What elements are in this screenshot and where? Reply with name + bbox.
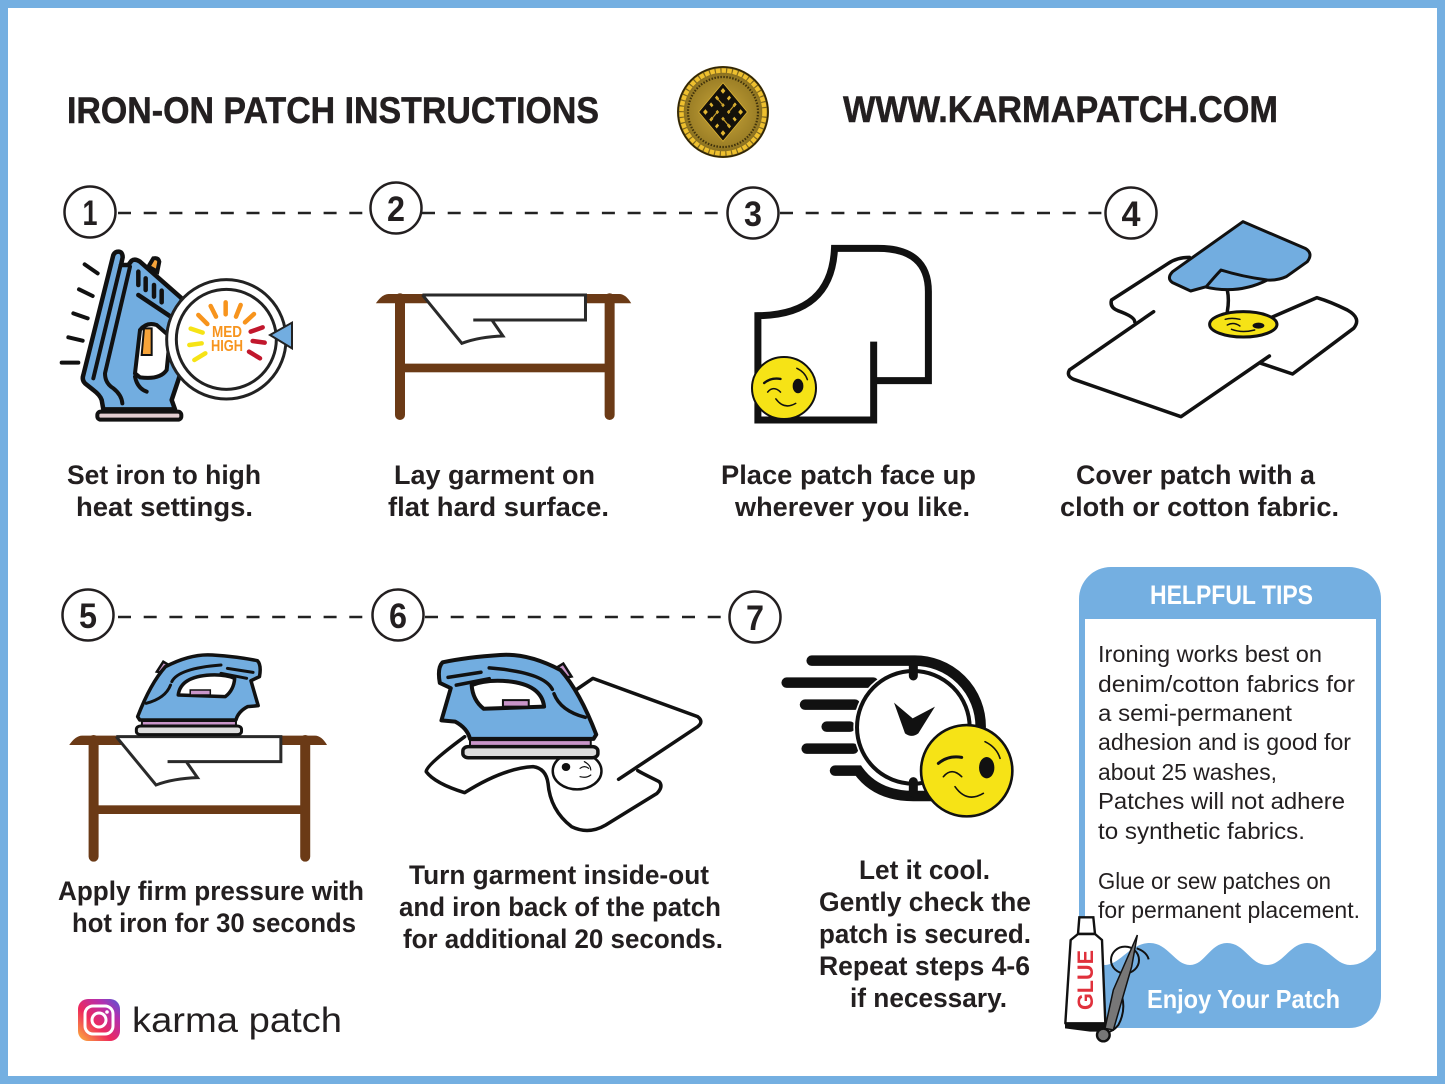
logo medallion xyxy=(677,66,769,158)
dial label xyxy=(211,324,243,355)
emoji patch on shirt xyxy=(752,357,816,419)
caption 5 xyxy=(58,876,364,938)
caption 6: Turn garment inside-out xyxy=(409,860,709,890)
caption 6 xyxy=(399,860,723,954)
step number 7: 7 xyxy=(746,599,764,638)
caption 6: and iron back of the patch xyxy=(399,892,721,922)
icon: glue tube and needle xyxy=(1065,917,1149,1041)
dial label: MED xyxy=(212,324,242,341)
step number 3: 3 xyxy=(744,195,762,234)
tips text: glue or sew: for permanent placement. xyxy=(1098,897,1360,923)
timeline row 1 xyxy=(64,182,1156,238)
icon: iron on table xyxy=(69,655,327,857)
instagram handle xyxy=(78,999,342,1041)
tips text: glue or sew: Glue or sew patches on xyxy=(1098,868,1331,894)
tips text: fabrics: a semi-permanent xyxy=(1098,700,1292,726)
step number 4 xyxy=(1106,188,1156,238)
step number 5: 5 xyxy=(79,597,97,636)
timeline row 2 xyxy=(62,590,780,642)
icon: shirt covered by cloth xyxy=(1068,222,1357,417)
caption 4: Cover patch with a xyxy=(1076,460,1316,490)
caption 3: Place patch face up xyxy=(721,460,976,490)
step number 7 xyxy=(730,592,780,642)
step number 1 xyxy=(64,186,116,238)
icon: instagram xyxy=(78,999,120,1041)
panel footer: Enjoy Your Patch xyxy=(1147,984,1340,1014)
caption 7: Let it cool. xyxy=(859,855,990,885)
tips text: glue or sew xyxy=(1098,868,1360,923)
caption 2: Lay garment on xyxy=(394,460,595,490)
tips text: fabrics: Patches will not adhere xyxy=(1098,788,1345,814)
icon: iron with heat dial xyxy=(62,252,292,420)
tips text: fabrics: to synthetic fabrics. xyxy=(1098,818,1305,844)
step number 2: 2 xyxy=(387,190,405,229)
caption 1: heat settings. xyxy=(76,492,253,522)
tips text: fabrics xyxy=(1098,641,1355,844)
caption 4: cloth or cotton fabric. xyxy=(1060,492,1339,522)
tips text: fabrics: denim/cotton fabrics for xyxy=(1098,671,1355,697)
tips heading: HELPFUL TIPS xyxy=(1150,580,1313,610)
caption 2 xyxy=(388,460,609,522)
step number 3 xyxy=(728,188,778,238)
glue label: GLUE xyxy=(1073,950,1098,1010)
caption 7: Repeat steps 4-6 xyxy=(819,951,1030,981)
caption 7: if necessary. xyxy=(850,983,1007,1013)
step number 4: 4 xyxy=(1122,195,1141,234)
step number 6 xyxy=(372,590,424,640)
step number 2 xyxy=(370,182,422,234)
tips text: fabrics: about 25 washes, xyxy=(1098,759,1277,785)
caption 3: wherever you like. xyxy=(734,492,970,522)
dial label: HIGH xyxy=(211,338,243,355)
tips text: fabrics: Ironing works best on xyxy=(1098,641,1322,667)
icon: fast clock xyxy=(787,661,981,796)
step number 1: 1 xyxy=(82,194,98,233)
caption 7: patch is secured. xyxy=(819,919,1031,949)
caption 6: for additional 20 seconds. xyxy=(403,924,723,954)
step number 5 xyxy=(62,590,114,640)
icon: inside-out garment with iron xyxy=(426,655,701,830)
caption 5: hot iron for 30 seconds xyxy=(72,908,356,938)
caption 2: flat hard surface. xyxy=(388,492,609,522)
caption 1: Set iron to high xyxy=(67,460,261,490)
icon: shirt with patch xyxy=(758,248,928,420)
step number 6: 6 xyxy=(389,597,407,636)
website url: WWW.KARMAPATCH.COM xyxy=(843,89,1278,130)
icon: garment on table xyxy=(376,294,631,415)
panel: helpful tips xyxy=(1079,567,1381,1028)
caption 5: Apply firm pressure with xyxy=(58,876,364,906)
emoji patch by clock xyxy=(921,725,1012,816)
title: IRON-ON PATCH INSTRUCTIONS xyxy=(67,90,599,131)
caption 7: Gently check the xyxy=(819,887,1031,917)
caption 7 xyxy=(819,855,1031,1013)
caption 4 xyxy=(1060,460,1339,522)
tips text: fabrics: adhesion and is good for xyxy=(1098,729,1351,755)
instagram handle: karma patch xyxy=(132,1001,342,1040)
caption 1 xyxy=(67,460,261,522)
caption 3 xyxy=(721,460,976,522)
